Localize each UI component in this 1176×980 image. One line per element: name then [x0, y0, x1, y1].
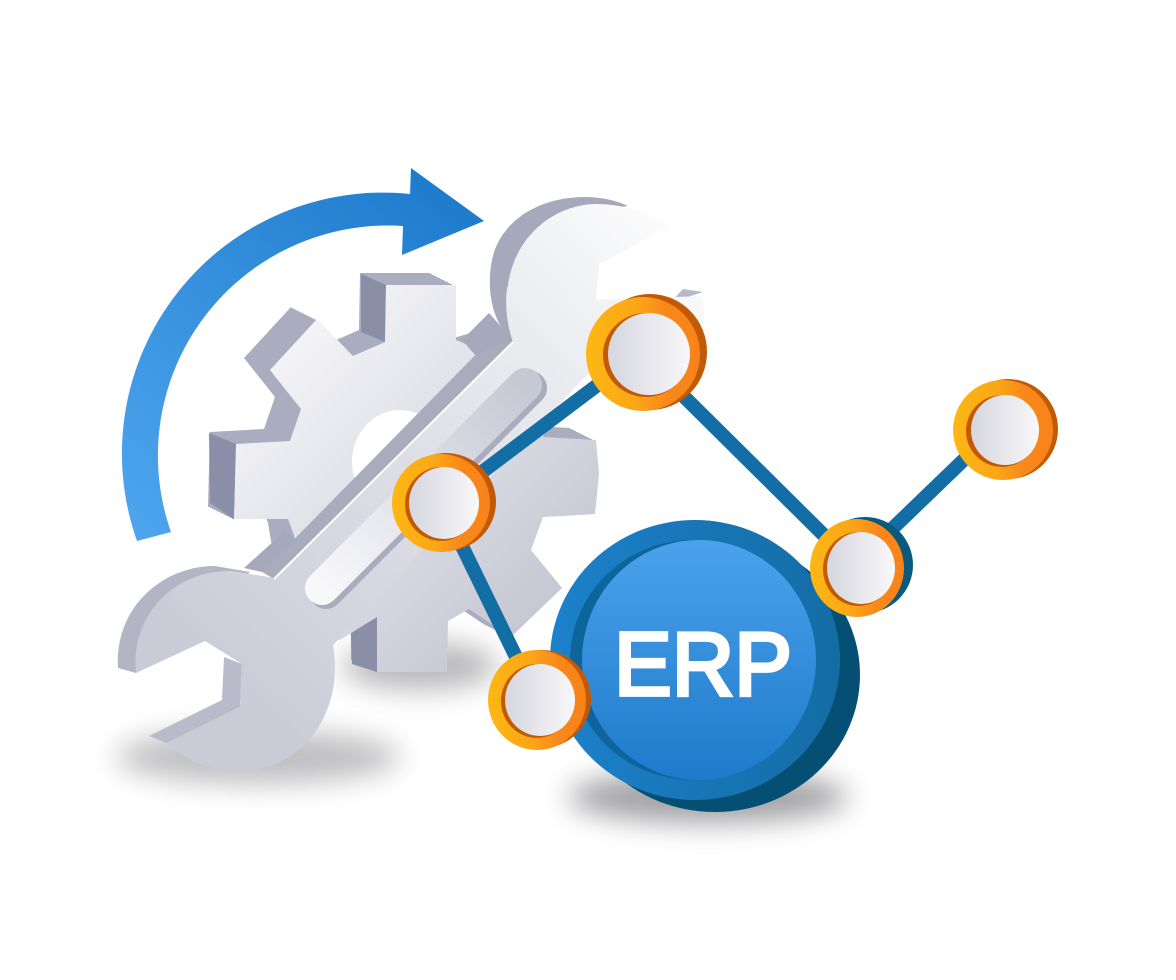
ground shadow: gear — [342, 642, 498, 690]
gear dark side facets — [209, 274, 386, 672]
gear icon — [208, 273, 599, 672]
ERP badge — [550, 520, 860, 812]
ground shadow: wrench — [116, 730, 400, 784]
curved blue arrow — [122, 168, 484, 541]
ERP label: ERP — [614, 615, 792, 715]
wrench slot — [322, 385, 530, 592]
ground shadow: ERP badge — [568, 771, 848, 823]
wrench extrusion — [118, 566, 250, 673]
badge ring — [550, 520, 840, 800]
node: left — [392, 453, 496, 552]
network connector lines — [441, 353, 1003, 700]
badge face — [582, 540, 816, 780]
wrench front face — [135, 204, 704, 771]
gear front face — [234, 285, 599, 672]
wrench edge highlight — [274, 342, 513, 579]
node: top — [586, 294, 707, 411]
node: right of badge — [810, 517, 913, 617]
wrench icon — [118, 197, 704, 771]
node: bottom — [488, 650, 591, 750]
node: far right — [953, 379, 1058, 480]
badge back — [570, 538, 860, 812]
gear extrusion — [208, 273, 597, 672]
gear centre hole — [352, 410, 448, 514]
badge inner shadow — [570, 540, 816, 780]
